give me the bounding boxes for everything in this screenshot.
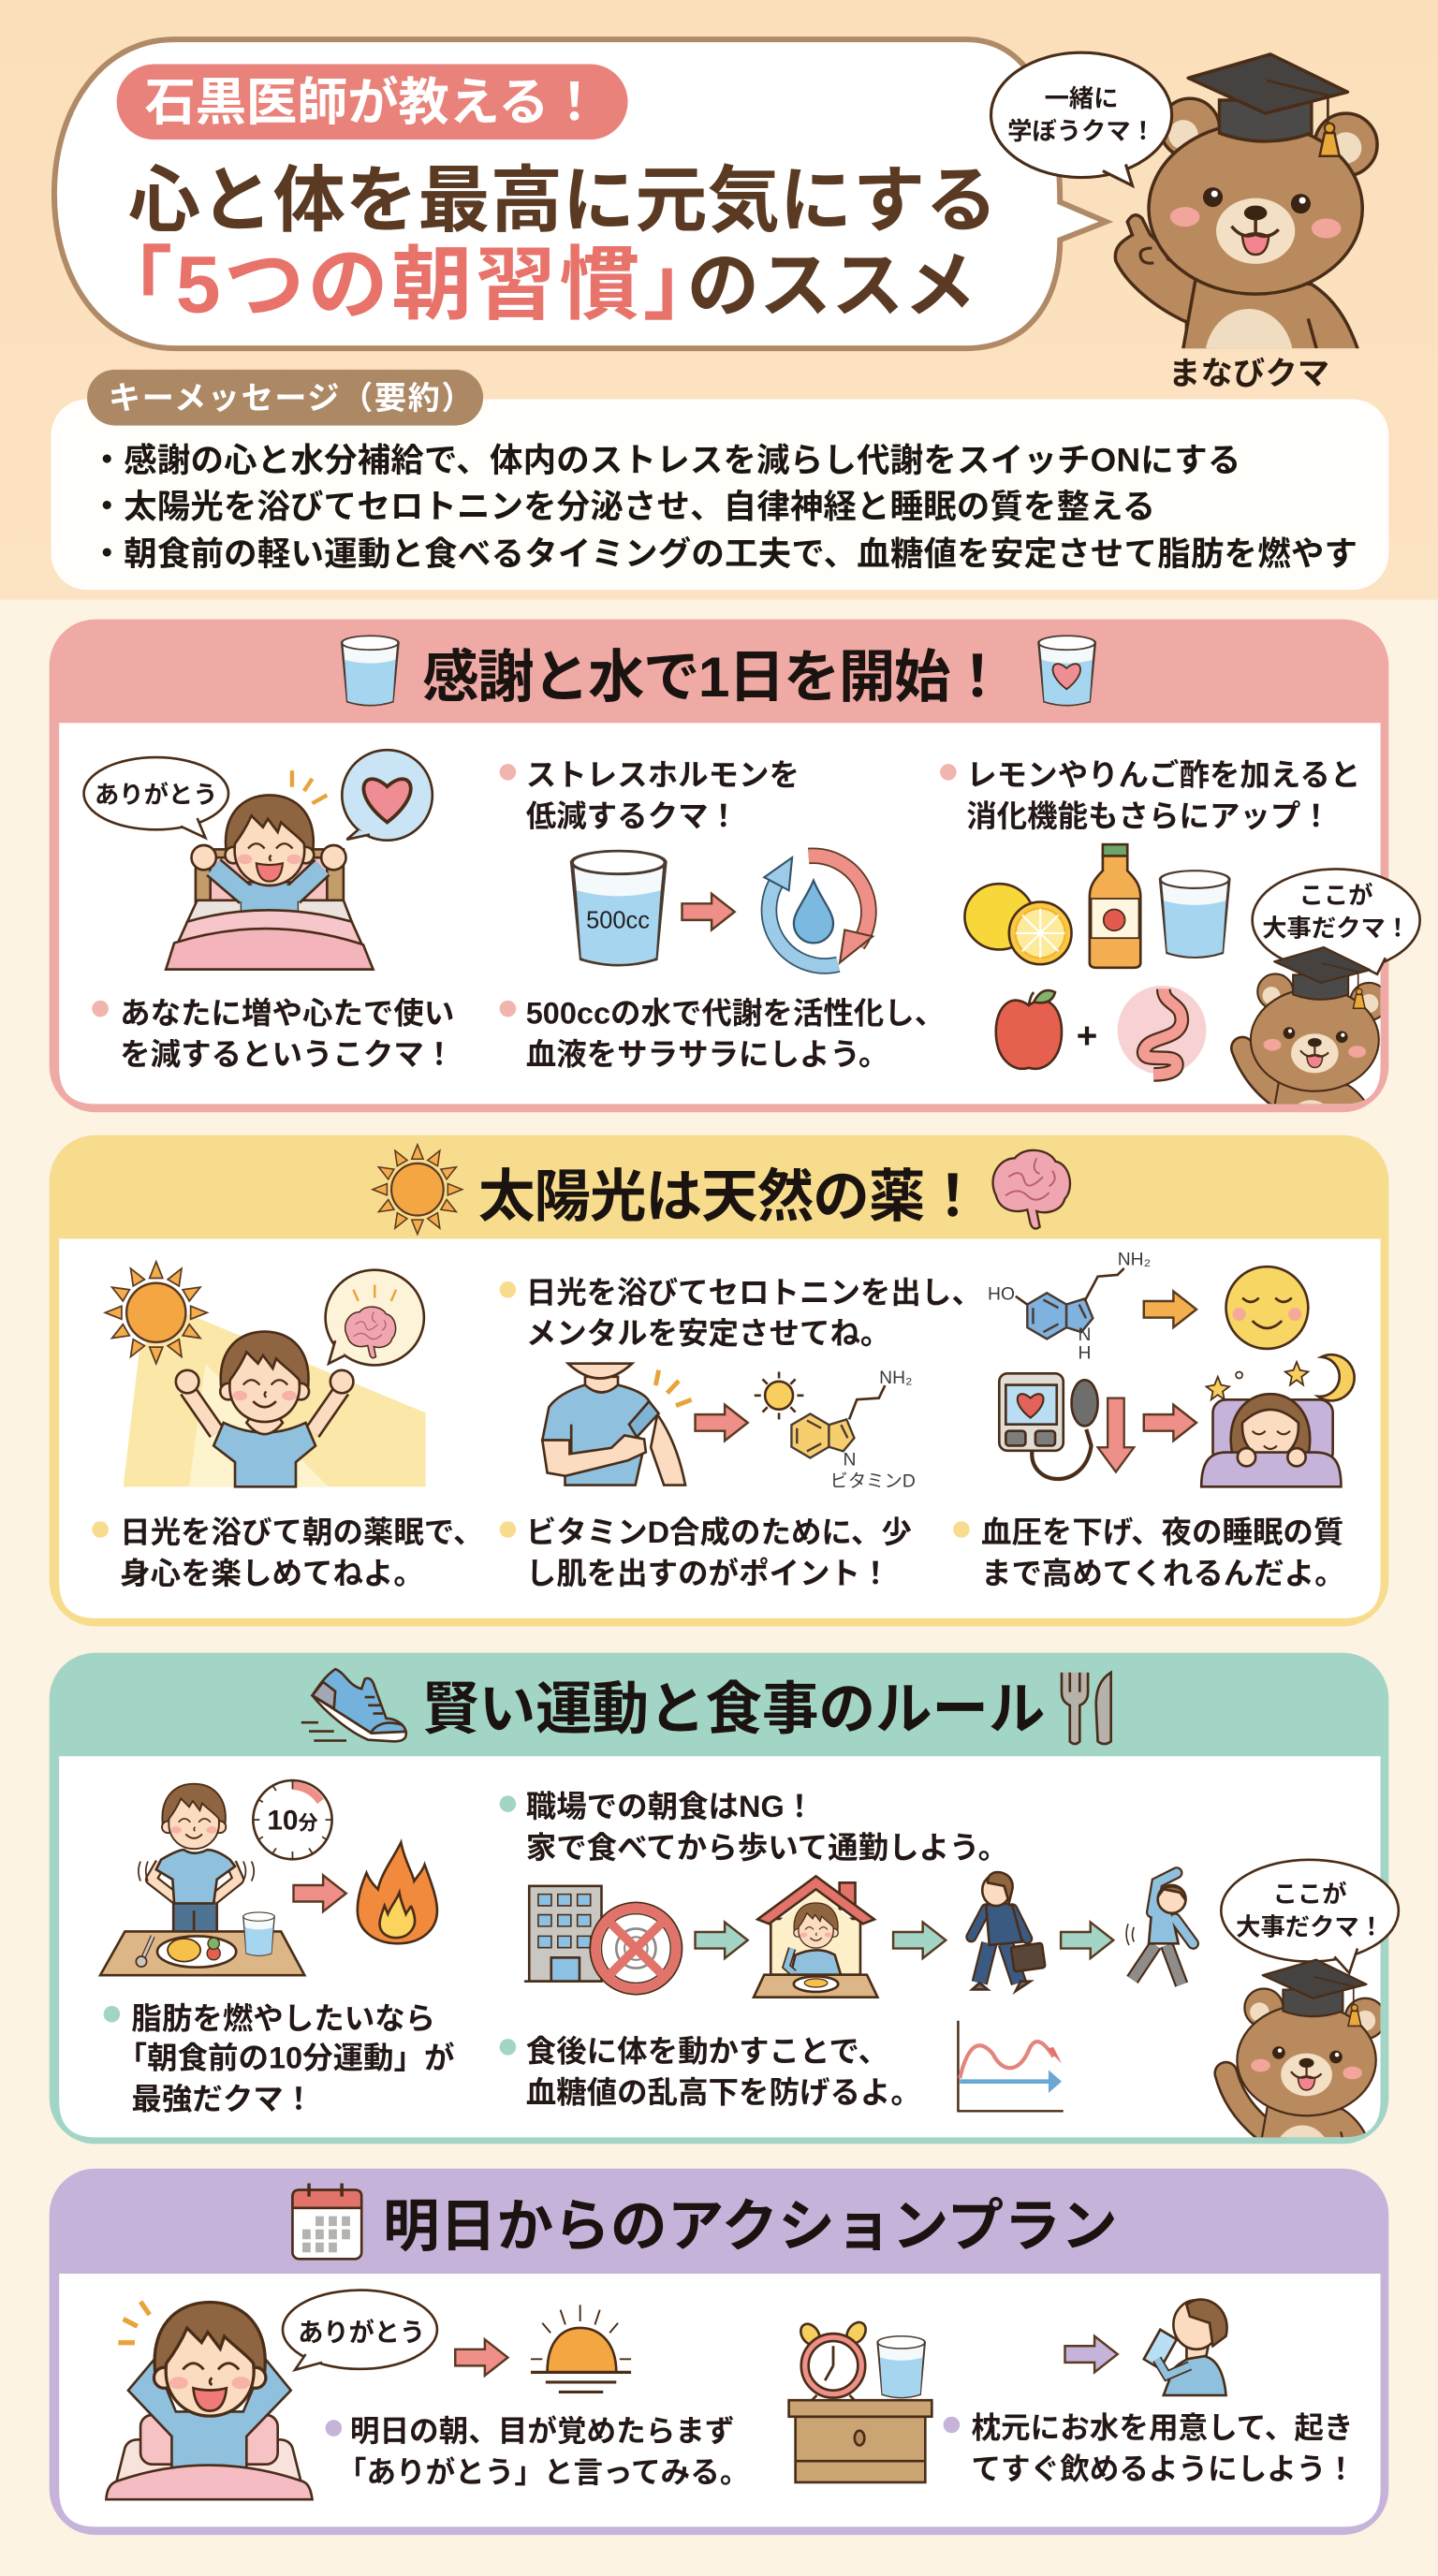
panel: sunlight [50,1135,1388,1627]
icon: small sun [755,1372,803,1419]
text: moving after meals: 血糖値の乱高下を防げるよ。 [526,2076,921,2110]
arrow [1061,1922,1113,1958]
text: exercise before breakfast [104,2002,454,2116]
bubble: thank you: ありがとう [298,2318,425,2347]
plus sign: + [1077,1017,1097,1057]
icon: stomach [1118,986,1206,1075]
text: exercise before breakfast: 「朝食前の10分運動」が [117,2041,454,2075]
icon: sunrise [531,2305,631,2392]
bubble: important: 大事だクマ！ [1236,1913,1384,1941]
text: metabolism [500,996,945,1071]
bubble: brain [326,1270,424,1365]
icon: flame [358,1842,437,1943]
text: stress hormone: 低減するクマ！ [526,799,739,833]
text: no workplace breakfast: 家で食べてから歩いて通勤しよう。 [526,1831,1008,1865]
key message tag: キーメッセージ（要約） [109,381,474,417]
bubble: important [1253,869,1420,974]
text: gratitude: あなたに増や心たで使い [120,996,454,1030]
icon: fork and knife [1062,1673,1111,1744]
chart: blood sugar curves [958,2021,1064,2111]
arrow [294,1875,346,1911]
arrow [696,1405,748,1441]
text: blood pressure [953,1515,1345,1590]
text: water by the pillow: てすぐ飲めるようにしよう！ [971,2452,1356,2485]
panel: exercise and meal rules [50,1653,1399,2199]
bubble: heart [342,750,433,841]
key message bullets [91,442,1357,573]
bubble: thank you: ありがとう [95,781,218,809]
icon: nightstand [789,2400,932,2482]
title line 2: のススメ [687,246,976,327]
bubble: learn together: 学ぼうクマ！ [1007,117,1155,145]
mascot: bear waving [1213,1958,1380,2138]
panel: key message [51,370,1388,590]
text: metabolism: 500ccの水で代謝を活性化し、 [526,996,945,1030]
section 3 frame [50,1653,1388,2144]
bubble: thank you [283,2291,437,2370]
bubble: learn together: 一緒に [1045,84,1119,112]
text: blood pressure: まで高めてくれるんだよ。 [981,1557,1345,1590]
mascot: manabi bear [1115,54,1377,422]
text: gratitude [92,996,454,1071]
text: stress hormone: ストレスホルモンを [526,758,800,792]
section 2 heading: 太陽光は天然の薬！ [478,1164,981,1228]
text: vitamin D: し肌を出すのがポイント！ [526,1556,890,1590]
key message bullets: ・感謝の心と水分補給で、体内のストレスを減らし代謝をスイッチONにする [91,442,1240,479]
icon: sun [373,1145,462,1235]
icon: office with no-meal sign [524,1886,682,1995]
icon: running shoe [301,1669,406,1741]
bubble: important: ここが [1273,1880,1347,1908]
arrow [893,1922,946,1958]
icon: calendar [292,2184,361,2259]
icon: vitamin D molecule: ビタミンD [829,1471,916,1491]
section 2 frame [50,1135,1388,1627]
illustration: commuting on foot [971,1872,1045,1991]
icon: vitamin D molecule: NH₂ [879,1368,913,1388]
section 3 heading: 賢い運動と食事のルール [422,1676,1045,1740]
text: sunlight [92,1515,484,1590]
section 1 heading: 感謝と水で1日を開始！ [422,645,1005,709]
icon: brain [993,1150,1070,1229]
arrow [1144,1405,1196,1441]
text: sunlight: 身心を楽しめてねよ。 [120,1557,424,1590]
panel: action plan [50,2169,1388,2535]
icon: blood pressure monitor [999,1373,1098,1479]
illustration: sleeping person [1201,1354,1355,1486]
icon: smiling face [1226,1266,1308,1349]
arrow: blood pressure down [1098,1398,1134,1472]
icon: alarm clock [797,2319,870,2404]
illustration: person drinking water [1144,2300,1227,2395]
arrow [1144,1292,1196,1327]
arrow [696,1922,748,1958]
icon: serotonin molecule: N [1078,1325,1091,1345]
mascot: bear waving [1230,945,1380,1105]
text: water by the pillow [944,2411,1356,2485]
icon: glass with heart [1038,636,1095,706]
icon: 10-minute clock: 10分 [267,1805,318,1836]
illustration: person exercising before breakfast [100,1784,304,1975]
arrow [455,2339,507,2376]
illustration: eating at home [754,1876,877,1998]
bubble: important: ここが [1299,881,1373,909]
arrow [682,894,735,929]
label pill [117,64,628,139]
key message tag [87,370,483,426]
icon: serotonin molecule: HO [988,1284,1015,1304]
icon: serotonin molecule: NH₂ [1118,1250,1151,1269]
text: moving after meals: 食後に体を動かすことで、 [526,2035,888,2069]
text: exercise before breakfast: 最強だクマ！ [131,2083,314,2116]
text: serotonin [500,1276,982,1351]
icon: vitamin D molecule: N [844,1451,856,1471]
text: blood pressure: 血圧を下げ、夜の睡眠の質 [981,1515,1343,1549]
icon: metabolism cycle [764,856,873,966]
icon: bedside glass [877,2336,925,2398]
section 1 frame [50,620,1388,1112]
arrow [1065,2336,1118,2372]
illustration: stretching person [1126,1873,1193,1984]
text: exercise before breakfast: 脂肪を燃やしたいなら [131,2002,435,2036]
header speech bubble with title [54,39,1106,348]
text: vitamin D [500,1515,912,1590]
text: lemon and vinegar [940,758,1360,833]
mascot caption: まなびクマ [1168,357,1329,392]
text: vitamin D: ビタミンD合成のために、少 [526,1515,912,1549]
text: sunlight: 日光を浴びて朝の薬眠で、 [120,1515,484,1549]
illustration: person in sunlight [105,1262,426,1486]
text: no workplace breakfast: 職場での朝食はNG！ [526,1790,814,1823]
bubble: thank you [84,757,228,838]
illustration: waking person [106,2302,313,2499]
icon: vinegar bottle [1090,844,1140,968]
section 4 frame [50,2169,1388,2535]
bubble: important [1221,1860,1399,1973]
title line 1: 心と体を最高に元気にする [128,160,998,241]
bubble: learn together [991,52,1172,185]
illustration: 500cc glass: 500cc [586,908,650,934]
title line 2: 「5つの朝習慣」 [92,240,726,329]
text: serotonin: メンタルを安定させてね。 [526,1317,890,1351]
icon: 10-minute clock [253,1780,332,1859]
illustration: 500cc glass [572,851,666,965]
text: serotonin: 日光を浴びてセロトニンを出し、 [526,1276,982,1310]
text: gratitude: を減するというこクマ！ [120,1037,454,1071]
text: no workplace breakfast [500,1790,1008,1865]
section 4 heading: 明日からのアクションプラン [383,2194,1118,2258]
text: say thank you: 明日の朝、目が覚めたらまず [350,2414,734,2448]
text: stress hormone [500,758,800,833]
bubble: important: 大事だクマ！ [1262,914,1410,942]
illustration: thankful person in bed [166,770,373,970]
text: water by the pillow: 枕元にお水を用意して、起き [971,2411,1353,2445]
text: say thank you [326,2414,749,2489]
icon: serotonin molecule: H [1078,1343,1091,1363]
icon: serotonin molecule [988,1250,1151,1363]
label pill: 石黒医師が教える！ [144,74,600,131]
icon: vitamin D molecule [791,1368,916,1491]
text: lemon and vinegar: レモンやりんご酢を加えると [966,758,1360,792]
icon: water glass [342,636,399,706]
panel: gratitude and water [49,620,1421,1112]
icon: glass of water [1160,871,1229,958]
icon: lemons [964,884,1072,964]
key message bullets: ・朝食前の軽い運動と食べるタイミングの工夫で、血糖値を安定させて脂肪を燃やす [91,535,1357,573]
text: lemon and vinegar: 消化機能もさらにアップ！ [966,799,1331,833]
text: say thank you: 「ありがとう」と言ってみる。 [337,2455,749,2489]
text: metabolism: 血液をサラサラにしよう。 [526,1037,888,1071]
key message bullets: ・太陽光を浴びてセロトニンを分泌させ、自律神経と睡眠の質を整える [91,488,1155,525]
illustration: exposed arm [542,1364,692,1486]
icon: apple [996,990,1062,1069]
text: moving after meals [500,2035,921,2110]
